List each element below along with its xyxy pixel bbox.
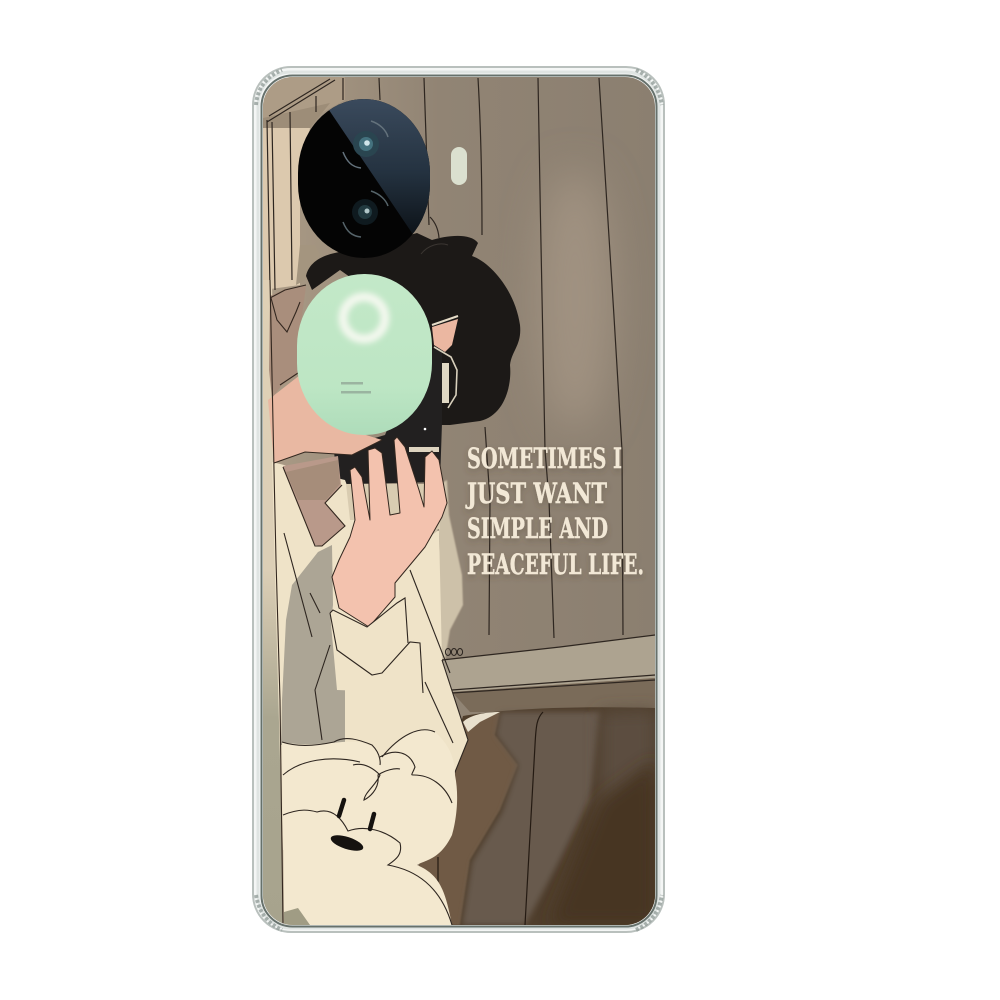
bench shading (410, 710, 655, 925)
curtain shadow (296, 246, 300, 285)
grip fine print (341, 382, 371, 394)
dog (282, 730, 457, 925)
curtain band (263, 103, 330, 130)
hair (306, 233, 520, 425)
wall (263, 77, 655, 925)
clear case shell (253, 67, 664, 932)
ring light (343, 297, 385, 339)
bottom left nook (284, 908, 310, 925)
bow highlight (421, 244, 448, 254)
wood plank lines (267, 78, 623, 660)
sleeve highlight (463, 712, 500, 732)
wall light patches (430, 170, 613, 660)
sweater fold lines (284, 533, 320, 637)
back ledge bands (442, 635, 655, 712)
dog curl (353, 764, 400, 800)
quote text: JUST WANT (465, 477, 607, 510)
cuffs (330, 612, 374, 690)
upper hand shadow (269, 287, 301, 398)
artist signature (445, 648, 463, 656)
sweater shadow (281, 545, 345, 745)
quote text: SIMPLE AND (467, 512, 608, 545)
raised hand (332, 437, 447, 627)
dog nose (330, 835, 364, 851)
sweater (272, 462, 468, 850)
camera strap (434, 347, 457, 408)
upper lens (343, 121, 388, 168)
quote text (465, 442, 644, 581)
upper hand (268, 375, 382, 463)
curtain top tan (263, 77, 345, 112)
dog outline (282, 730, 452, 925)
upper hand outlines (270, 280, 382, 925)
lower lens (343, 191, 388, 237)
camera body (334, 316, 458, 484)
fabric behind fingers (346, 484, 440, 530)
green magnetic grip (297, 274, 432, 435)
dog eyes (339, 800, 374, 829)
corner bumpers (256, 70, 662, 930)
printed artwork (263, 77, 655, 925)
arm behind (283, 456, 345, 546)
lens reflection (329, 99, 430, 234)
curtain light panel (263, 128, 310, 290)
left edge strip (263, 280, 283, 925)
neck skin (432, 319, 458, 352)
bench (410, 707, 655, 925)
bench seam (438, 712, 543, 925)
quote text: PEACEFUL LIFE. (467, 548, 644, 581)
flash (451, 147, 467, 185)
camera cutout (298, 99, 430, 258)
phone case illustration (252, 66, 665, 933)
quote text: SOMETIMES I (467, 442, 622, 475)
